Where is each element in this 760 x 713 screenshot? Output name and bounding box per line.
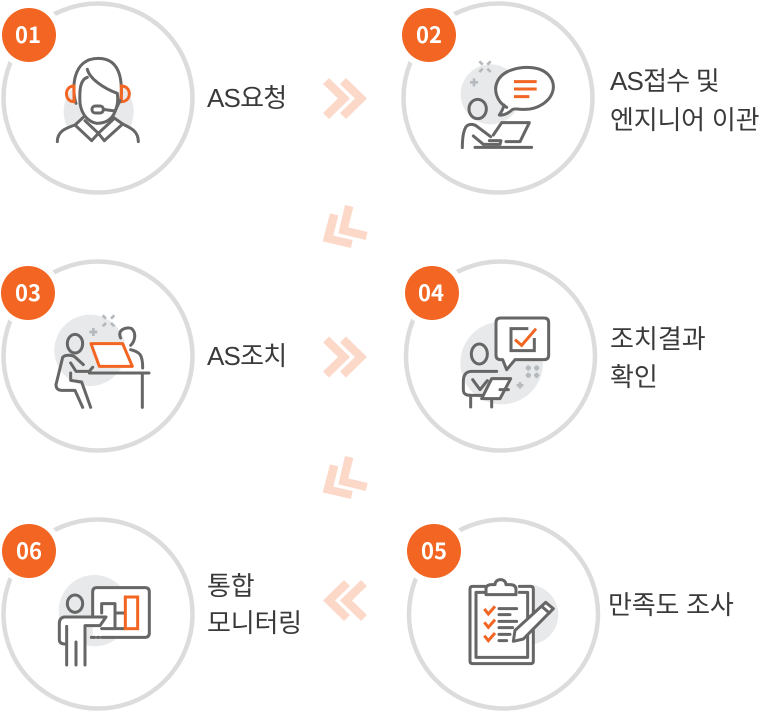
arrow: down-left 1 [323,205,368,248]
step circle [404,4,592,192]
number badge 05: 05 [421,534,447,566]
step circle [4,262,192,450]
arrow: down-left 2 [323,456,368,499]
panel: step 03 [0,260,286,450]
label: AS조치 [207,341,286,371]
number badge 02 [396,2,462,68]
label line 2: 모니터링 [207,608,302,638]
step circle [406,262,595,450]
icon: clipboard checklist [470,580,558,664]
number badge 05 [401,518,467,584]
number badge 01: 01 [15,18,41,50]
arrow: right 2 [323,336,367,378]
number badge 06: 06 [16,534,42,566]
panel: step 02 [396,2,759,192]
number badge 01 [0,2,62,68]
arrow: right 1 [323,78,367,119]
arrow: left [323,580,367,621]
panel: step 01 [0,2,286,192]
number badge 04 [399,260,465,326]
icon: two people at a laptop [54,315,149,407]
label line 2: 엔지니어 이관 [610,105,759,135]
step circle [4,520,192,708]
step circle [4,4,192,192]
number badge 03: 03 [15,276,41,308]
label line 2: 확인 [610,362,658,392]
label: 통합 [207,571,254,601]
step circle [409,520,598,708]
label: 조치결과 [610,324,706,354]
icon: person with checkmark bubble [460,318,549,407]
icon: presenter with chart [59,575,149,665]
number badge 02: 02 [416,18,442,50]
label: AS요청 [207,83,286,113]
label: AS접수 및 [610,66,719,96]
number badge 06 [0,518,62,584]
icon: headset agent [57,58,138,147]
icon: agent with speech bubble [461,61,553,148]
label: 만족도 조사 [608,590,734,620]
number badge 04: 04 [418,276,444,308]
panel: step 04 [399,260,706,450]
panel: step 06 [0,518,302,708]
number badge 03 [0,260,61,326]
panel: step 05 [401,518,734,708]
